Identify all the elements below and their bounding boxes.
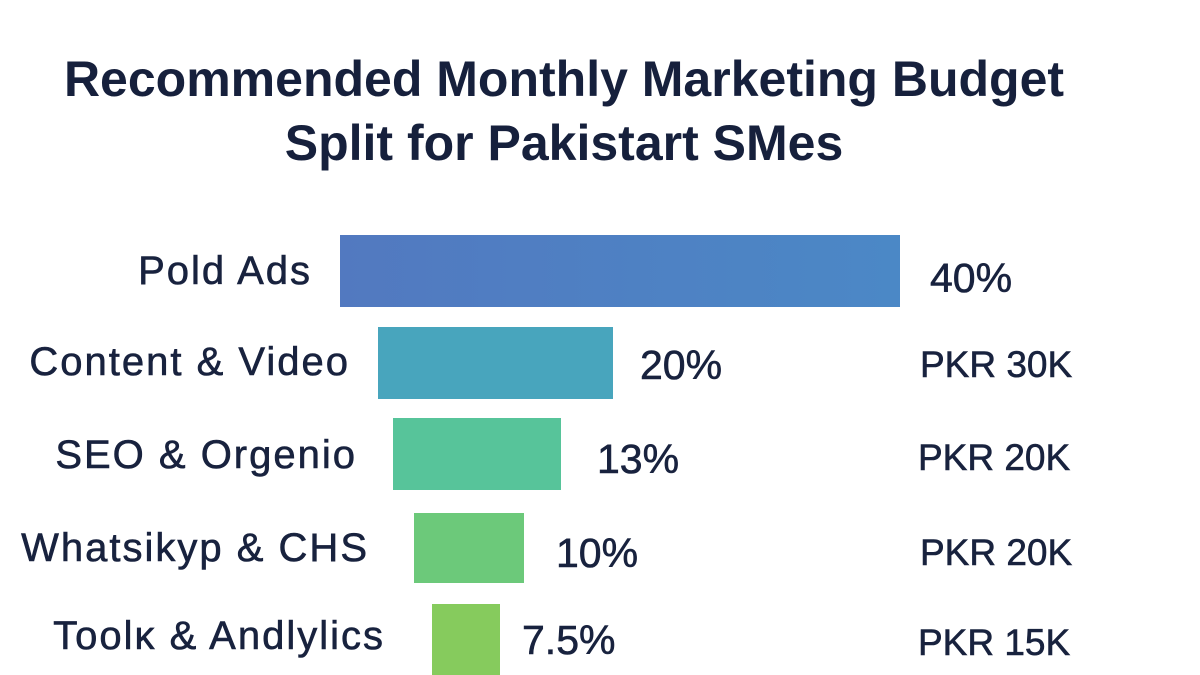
row: seo: SEO & Orgenio: [55, 433, 357, 477]
row: paid ads: Pold Ads: [138, 249, 312, 293]
row: tools: 7.5%: [522, 617, 615, 663]
row: content & video: [29, 327, 1072, 399]
row: content & video: Content & Video: [29, 340, 350, 384]
row: seo: 13%: [597, 436, 679, 482]
row: tools: Toolĸ & Andlylics: [53, 614, 385, 658]
row: tools: [53, 604, 1070, 675]
title: [64, 51, 1064, 171]
row: whatsapp: Whatsikyp & CHS: [21, 526, 369, 570]
row: tools: PKR 15K: [918, 622, 1070, 663]
row: whatsapp: PKR 20K: [920, 532, 1072, 573]
row: whatsapp: 10%: [556, 530, 638, 576]
row: paid ads: 40%: [930, 255, 1012, 301]
row: whatsapp: [20, 513, 1072, 583]
row: paid ads: [138, 235, 1012, 307]
title: Recommended Monthly Marketing Budget: [64, 51, 1064, 107]
row: seo: PKR 20K: [918, 437, 1070, 478]
row: seo: [55, 418, 1070, 490]
row: content & video: 20%: [640, 342, 722, 388]
title: Split for Pakistart SMes: [285, 115, 843, 171]
row: content & video: PKR 30K: [920, 344, 1072, 385]
bar chart: [20, 235, 1072, 675]
